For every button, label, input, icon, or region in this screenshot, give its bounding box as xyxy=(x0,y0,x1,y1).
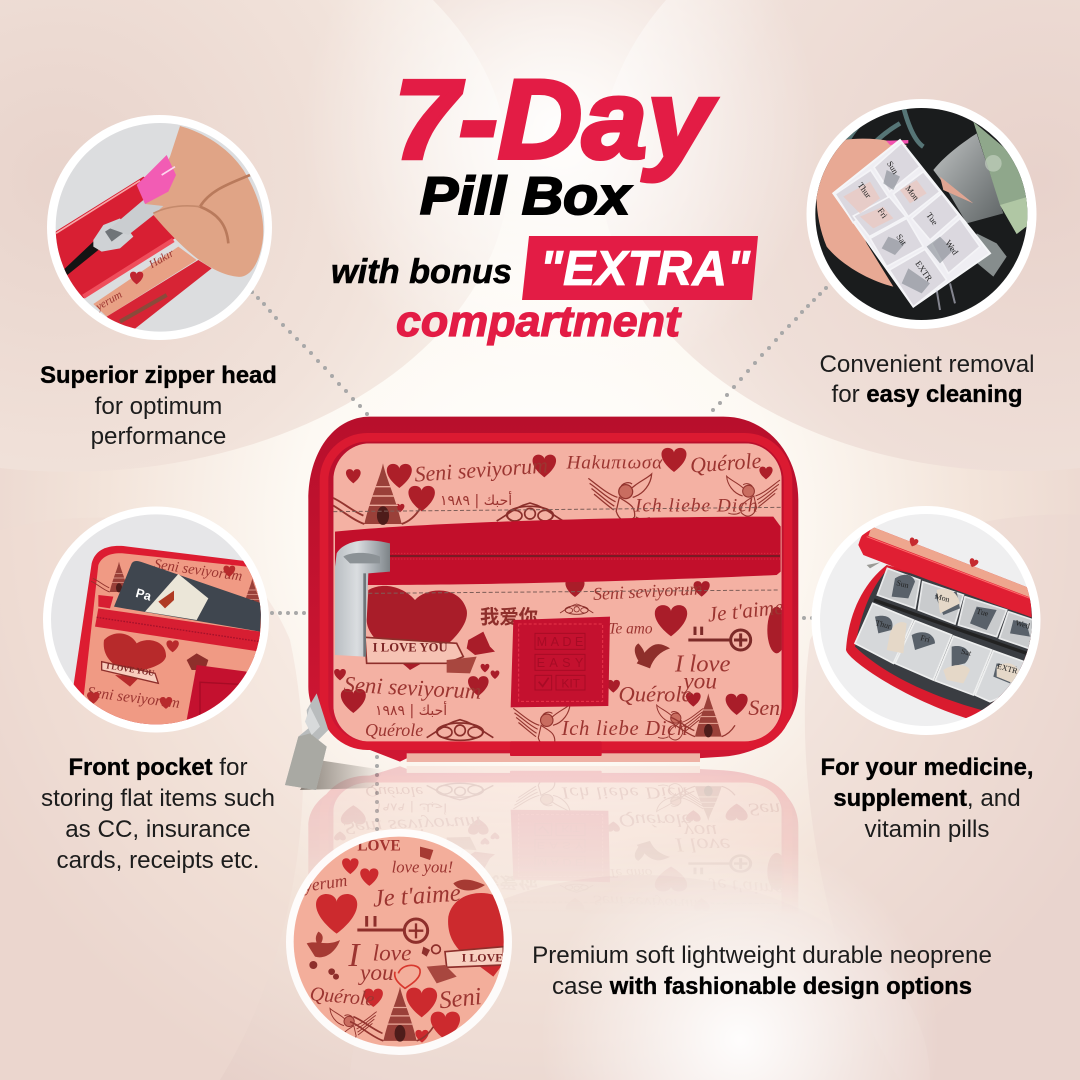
detail: fabric pattern xyxy=(280,829,520,1060)
case reflection xyxy=(308,766,798,892)
detail: fabric pattern: Quérole xyxy=(309,983,375,1011)
detail: front pocket photo: Seni seviyorum xyxy=(153,556,243,585)
fabric strip at base xyxy=(407,753,700,762)
caption: medicine: vitamin pills xyxy=(864,816,990,843)
caption: front pocket: as CC, insurance xyxy=(65,816,251,843)
caption: zipper head: for optimum xyxy=(95,393,222,420)
detail: open case with pills photo: Mon xyxy=(934,592,951,604)
pill organizer tray: EXTR xyxy=(913,259,935,283)
pill organizer tray: Fri xyxy=(876,206,890,221)
detail: open case with pills photo: Fri xyxy=(919,633,932,645)
detail: open case with pills photo: Sun xyxy=(895,578,910,590)
fabric panel: Quérole xyxy=(618,682,692,707)
product: red pill box case xyxy=(308,417,798,762)
detail: fabric pattern: love xyxy=(373,941,412,967)
detail: cleaning photo xyxy=(806,99,1036,329)
bottom tab xyxy=(510,741,602,756)
caption: front pocket: storing flat items such xyxy=(41,785,275,812)
hand xyxy=(145,126,263,277)
caption: neoprene: case with fashionable design options xyxy=(552,973,972,1000)
fabric panel: أحبك | ١٩٨٩ xyxy=(440,491,512,509)
detail: fabric pattern: Seni xyxy=(438,983,483,1014)
detail: open case with pills photo: Tue xyxy=(975,607,990,619)
detail: open case with pills photo: Thur xyxy=(874,618,892,631)
top pattern xyxy=(346,448,773,512)
detail: open case with pills photo xyxy=(812,506,1040,735)
detail: open case with pills photo: EXTR xyxy=(996,662,1019,676)
heading: 7-Day: 7-Day xyxy=(394,57,717,182)
fabric panel: Je t'aime xyxy=(706,595,785,627)
detail: fabric pattern: you xyxy=(358,960,394,986)
fabric panel: you xyxy=(681,668,717,694)
fabric panel: Te amo xyxy=(608,620,653,637)
fabric panel: I love xyxy=(674,651,730,678)
zipper slider and pull xyxy=(335,540,390,657)
pill organizer tray: Thur xyxy=(856,180,874,200)
pill organizer tray xyxy=(833,140,990,307)
pill organizer tray: Tue xyxy=(924,210,940,227)
pill organizer tray: Wed xyxy=(943,238,961,257)
lower pattern xyxy=(334,579,786,715)
fabric panel: Ich liebe Dich xyxy=(561,718,688,740)
caption: medicine: supplement, and xyxy=(833,785,1021,812)
detail: zipper head photo: yerum xyxy=(93,289,124,314)
zipper pocket band xyxy=(335,517,781,585)
detail: fabric pattern: Je t'aime xyxy=(372,880,462,913)
detail: front pocket photo: I LOVE YOU xyxy=(106,661,155,678)
fabric panel: أحبك | ١٩٨٩ xyxy=(375,701,447,719)
zipper band xyxy=(95,608,260,652)
pill organizer tray: Sun xyxy=(885,159,901,176)
I LOVE YOU ribbon xyxy=(365,637,477,673)
fabric panel: 我爱你 xyxy=(480,601,538,629)
lower pattern xyxy=(104,633,166,673)
caption: front pocket: cards, receipts etc. xyxy=(57,847,259,874)
fabric panel xyxy=(327,443,786,747)
caption: zipper head: performance xyxy=(91,423,226,450)
lower case shell xyxy=(846,565,1033,718)
caption: front pocket: Front pocket for xyxy=(68,754,248,781)
brand patch: KIT xyxy=(561,676,581,690)
fabric panel: Seni seviyorum xyxy=(343,672,482,704)
I LOVE YOU ribbon: I LOVE YOU xyxy=(373,641,448,655)
brand patch: EASY xyxy=(537,656,584,670)
detail: front pocket photo xyxy=(43,506,269,732)
lower zipper pull xyxy=(285,693,328,790)
detail: fabric pattern: yerum xyxy=(301,871,348,896)
hand xyxy=(817,139,907,287)
caption: easy cleaning: Convenient removal xyxy=(819,351,1035,378)
caption: medicine: For your medicine, xyxy=(821,754,1033,781)
compartments front row xyxy=(855,603,1033,702)
fabric panel: Quérole xyxy=(365,720,423,740)
detail: zipper head photo: Hakır xyxy=(146,247,177,271)
caption: easy cleaning: for easy cleaning xyxy=(831,381,1023,408)
angel and church motifs xyxy=(327,463,420,525)
detail: open case with pills photo: Sat xyxy=(960,647,973,658)
caption: neoprene: Premium soft lightweight durable neoprene xyxy=(532,942,992,969)
red lid xyxy=(858,527,1032,617)
ribbon: I LOVE xyxy=(462,950,503,964)
compartments back row xyxy=(877,568,1033,650)
caption: zipper head: Superior zipper head xyxy=(40,362,277,389)
title xyxy=(331,57,758,346)
detail: front pocket photo: Seni seviyorum xyxy=(86,684,181,712)
dotted leader lines xyxy=(250,286,828,831)
card: Pa xyxy=(134,586,154,604)
badge: EXTRA: "EXTRA" xyxy=(540,242,751,296)
fabric panel: Seni xyxy=(748,695,786,720)
card xyxy=(114,561,262,632)
brand patch: MADE xyxy=(537,635,583,649)
fabric panel: Seni seviyorum xyxy=(414,452,549,487)
fabric panel: Ich liebe Dich xyxy=(634,496,758,517)
detail: fabric pattern: I xyxy=(347,937,361,974)
rim xyxy=(324,437,788,746)
heading: Pill Box: Pill Box xyxy=(420,167,633,226)
ribbon xyxy=(427,947,503,983)
detail: fabric pattern: LOVE xyxy=(357,838,401,855)
heading: with bonus: with bonus xyxy=(331,253,512,291)
detail: zipper head photo xyxy=(47,115,272,340)
fabric panel: Quérole xyxy=(689,448,762,478)
key xyxy=(357,916,428,942)
pill organizer tray: Mon xyxy=(903,183,922,203)
fabric panel: Hakuπιωσα xyxy=(566,452,663,473)
heading: compartment: compartment xyxy=(396,297,682,346)
key motif xyxy=(688,627,751,650)
detail: fabric pattern: love you! xyxy=(392,858,453,877)
brand patch xyxy=(511,617,610,707)
case body xyxy=(308,417,798,762)
pill organizer tray: Sat xyxy=(894,232,909,247)
shadow under case xyxy=(300,760,384,790)
fabric panel: Seni seviyorum xyxy=(592,578,703,604)
detail: open case with pills photo: Wed xyxy=(1014,618,1031,631)
